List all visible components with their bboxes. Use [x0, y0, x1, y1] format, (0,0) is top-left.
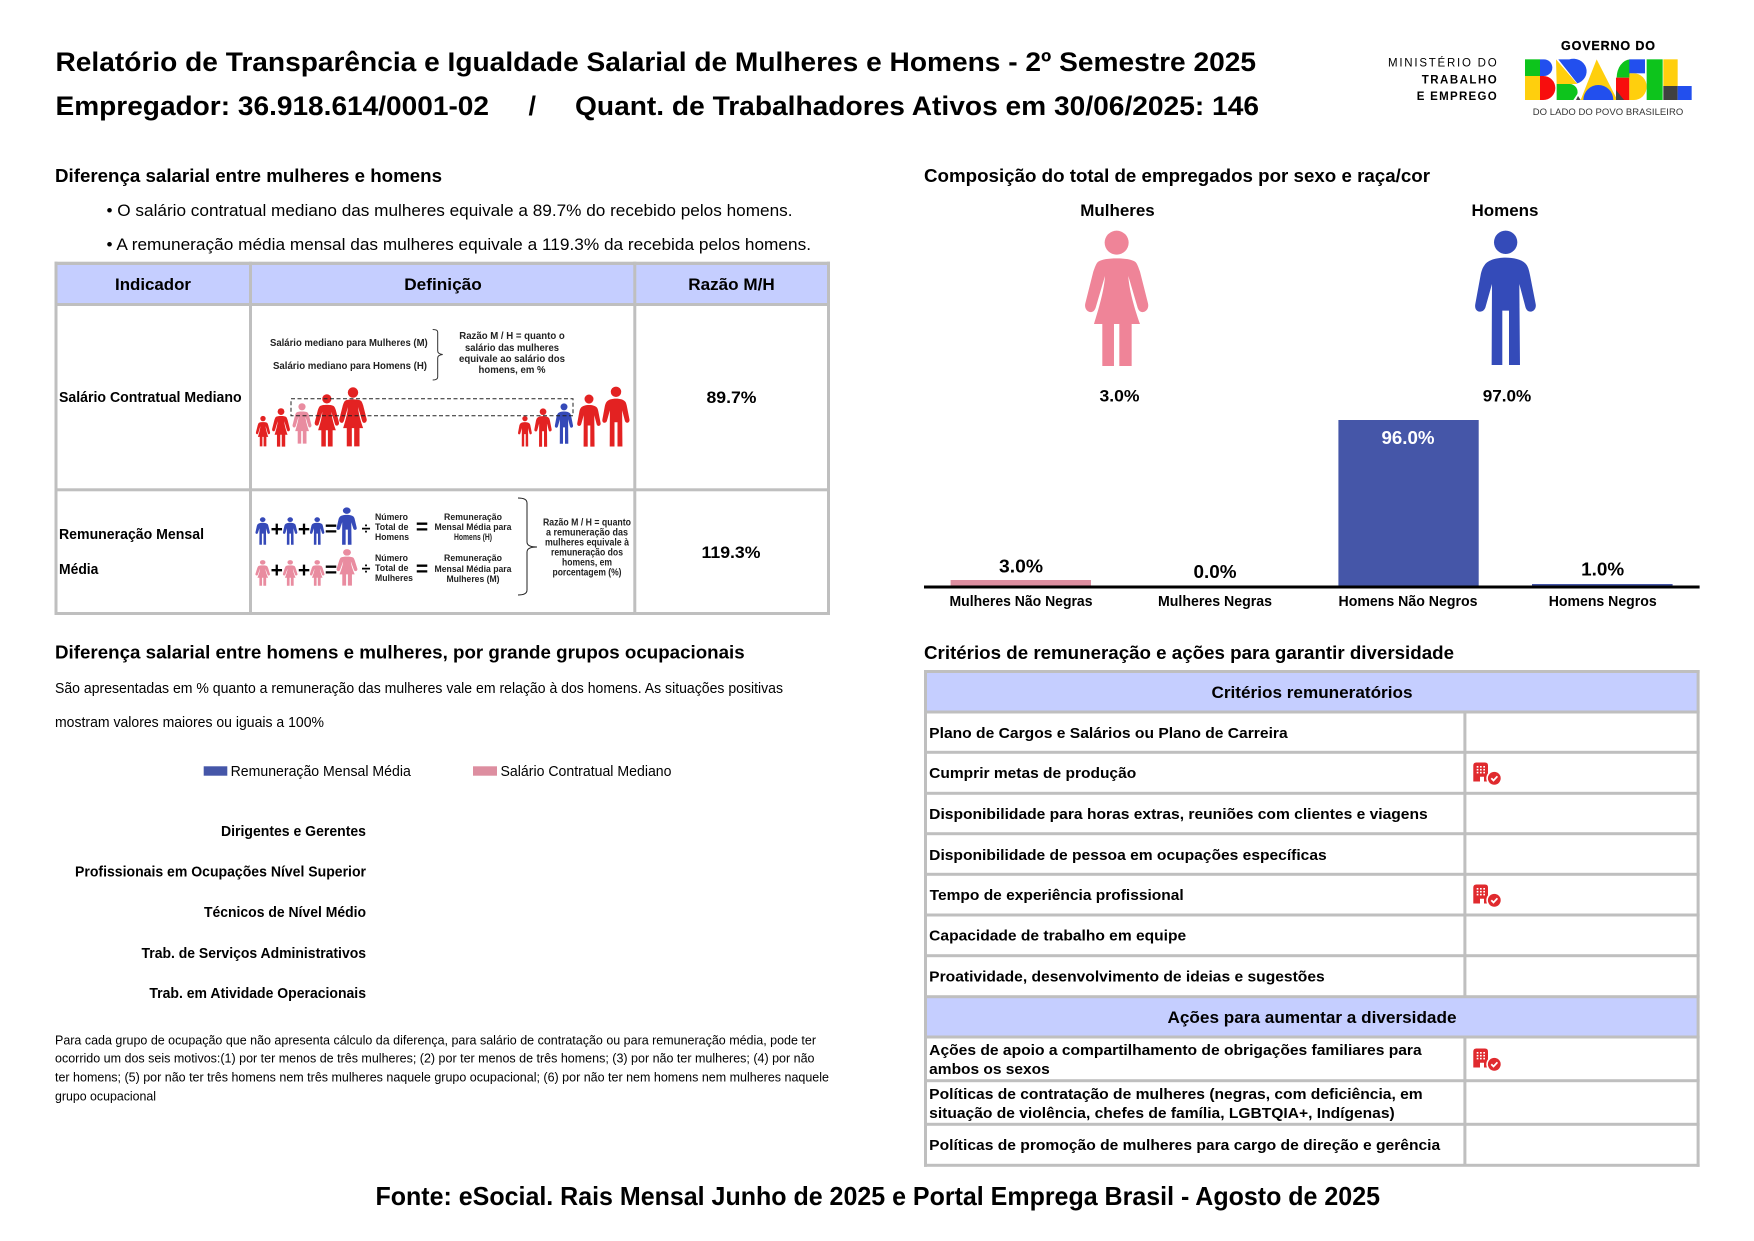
illustration: remuneração média: ÷	[362, 521, 371, 538]
row: salário contratual mediano: 89.7%	[706, 389, 757, 407]
illustration: salário mediano	[256, 330, 630, 447]
chart labels: grupos ocupacionais: Dirigentes e Gerentes	[221, 824, 366, 840]
illustration: remuneração média: Mensal Média para	[434, 564, 512, 575]
illustration: salário mediano: Salário mediano para Mulheres (M)	[270, 338, 428, 349]
illustration: salário mediano: salário das mulheres	[465, 343, 559, 354]
icon: empresa cumpre metas de produção	[1473, 762, 1502, 786]
logo: Ministério do Trabalho e Emprego: MINISTÉRIO DO	[1388, 57, 1497, 70]
footnote: ocorrido um dos seis motivos:(1) por ter menos de três mulheres; (2) por ter menos de três homens; (3) por não ter mulheres; (4) por não	[55, 1051, 814, 1066]
icon: woman	[1085, 231, 1148, 366]
logo: Governo do Brasil: GOVERNO DO	[1561, 39, 1655, 53]
group: homens: Homens	[1472, 202, 1538, 220]
bar chart: sexo e raça/cor: 0.0%	[1194, 562, 1236, 582]
illustration: remuneração média: Homens	[375, 532, 409, 543]
illustration: remuneração média: Homens (H)	[454, 532, 492, 543]
illustration: remuneração média: homens, em	[562, 558, 612, 569]
illustration: remuneração média: Remuneração	[444, 553, 502, 564]
illustration: remuneração média: +	[271, 518, 283, 541]
action rows	[929, 1042, 1441, 1154]
row: salário contratual mediano	[59, 389, 757, 407]
illustration: remuneração média: ÷	[362, 561, 371, 578]
group: homens: 97.0%	[1483, 388, 1532, 406]
illustration: remuneração média: remuneração dos	[551, 548, 623, 559]
criteria rows: Disponibilidade para horas extras, reuniões com clientes e viagens	[929, 806, 1428, 823]
title	[56, 47, 1259, 121]
row: salário contratual mediano: Salário Contratual Mediano	[59, 390, 242, 406]
logo: Governo do Brasil	[1525, 39, 1692, 118]
illustration: remuneração média: +	[298, 559, 310, 582]
title: Relatório de Transparência e Igualdade Salarial de Mulheres e Homens - 2º Semestre 2025	[56, 47, 1256, 77]
heading: Composição do total de empregados por sexo e raça/cor	[924, 165, 1430, 186]
bar chart: sexo e raça/cor: 1.0%	[1581, 560, 1624, 580]
illustration: salário mediano: equivale ao salário dos	[459, 354, 565, 365]
illustration: remuneração média: =	[416, 516, 428, 539]
bar chart: sexo e raça/cor: Homens Negros	[1549, 594, 1657, 610]
legend	[204, 764, 671, 780]
bullet points: • O salário contratual mediano das mulheres equivale a 89.7% do recebido pelos homens.	[106, 202, 792, 220]
bar chart: sexo e raça/cor: Mulheres Negras	[1158, 594, 1272, 610]
legend: Remuneração Mensal Média	[231, 764, 412, 780]
heading: Critérios de remuneração e ações para garantir diversidade	[924, 642, 1454, 663]
illustration: remuneração média: Mulheres (M)	[446, 574, 500, 585]
criteria rows: Tempo de experiência profissional	[930, 887, 1184, 904]
footer source: Fonte: eSocial. Rais Mensal Junho de 2025 e Portal Emprega Brasil - Agosto de 2025	[376, 1181, 1380, 1211]
action rows: Ações de apoio a compartilhamento de obrigações familiares para	[929, 1042, 1422, 1059]
bullet points: • A remuneração média mensal das mulheres equivale a 119.3% da recebida pelos homens.	[106, 236, 811, 254]
illustration: remuneração média: a remuneração das	[546, 528, 629, 539]
criteria rows: Disponibilidade de pessoa em ocupações específicas	[929, 847, 1327, 864]
illustration: remuneração média: Número	[375, 512, 408, 523]
table headers	[115, 276, 775, 294]
illustration: remuneração média: Número	[375, 553, 408, 564]
description	[55, 681, 783, 731]
illustration: remuneração média: Total de	[375, 522, 408, 533]
footnote	[55, 1032, 829, 1104]
title: Quant. de Trabalhadores Ativos em 30/06/2025: 146	[575, 91, 1259, 121]
title: /	[528, 91, 536, 121]
icon: empresa considera tempo de experiência	[1473, 884, 1502, 908]
panel: diferença salarial por grandes grupos ocupacionais	[55, 641, 829, 1104]
legend: Salário Contratual Mediano	[500, 764, 672, 780]
illustration: remuneração média: =	[325, 559, 337, 582]
illustration: remuneração média: Remuneração	[444, 512, 502, 523]
chart labels: grupos ocupacionais	[75, 824, 366, 1002]
logo: Ministério do Trabalho e Emprego: TRABALHO	[1422, 74, 1497, 86]
section header: ações para aumentar a diversidade: Ações para aumentar a diversidade	[1168, 1009, 1456, 1027]
heading: Diferença salarial entre mulheres e homens	[55, 165, 442, 186]
illustration: remuneração média: Total de	[375, 563, 408, 574]
footnote: Para cada grupo de ocupação que não apresenta cálculo da diferença, para salário de contratação ou para remuneração média, pode ter	[55, 1032, 817, 1048]
bar chart: sexo e raça/cor: 3.0%	[999, 557, 1043, 577]
bar chart: sexo e raça/cor: Mulheres Não Negras	[950, 594, 1092, 610]
bar chart: sexo e raça/cor: Homens Não Negros	[1338, 594, 1478, 610]
panel: diferença salarial entre mulheres e homens	[54, 165, 830, 615]
table headers: Indicador	[115, 276, 192, 294]
illustration: remuneração média: Mensal Média para	[434, 522, 512, 533]
group: homens	[1472, 202, 1538, 406]
footnote: ter homens; (5) por não ter três homens nem três mulheres naquele grupo ocupacional; (6) por não ter nem homens nem mulheres naquele	[55, 1070, 829, 1085]
criteria rows: Capacidade de trabalho em equipe	[929, 928, 1186, 944]
logo: Ministério do Trabalho e Emprego: E EMPREGO	[1417, 91, 1497, 103]
chart labels: grupos ocupacionais: Técnicos de Nível Médio	[204, 905, 366, 921]
criteria rows: Proatividade, desenvolvimento de ideias e sugestões	[929, 969, 1325, 986]
description: São apresentadas em % quanto a remuneração das mulheres vale em relação à dos homens. As situações positivas	[55, 681, 783, 697]
bar chart: sexo e raça/cor: 96.0%	[1382, 428, 1434, 448]
group: mulheres	[1080, 202, 1155, 406]
description: mostram valores maiores ou iguais a 100%	[55, 715, 324, 731]
criteria rows	[929, 725, 1428, 986]
title: Empregador: 36.918.614/0001-02	[56, 91, 489, 121]
icon: man	[1475, 231, 1536, 365]
illustration: remuneração média: =	[325, 518, 337, 541]
chart labels: grupos ocupacionais: Trab. em Atividade Operacionais	[149, 986, 366, 1002]
criteria rows: Cumprir metas de produção	[929, 765, 1136, 782]
section header: critérios remuneratórios: Critérios remuneratórios	[1212, 684, 1412, 702]
action rows: Políticas de contratação de mulheres (negras, com deficiência, em	[929, 1086, 1423, 1103]
logo: Governo do Brasil: DO LADO DO POVO BRASILEIRO	[1533, 107, 1683, 118]
table: critérios e ações	[924, 670, 1700, 1167]
illustration: remuneração média: mulheres equivale à	[545, 538, 629, 549]
action rows: situação de violência, chefes de família, LGBTQIA+, Indígenas)	[929, 1105, 1395, 1122]
action rows: ambos os sexos	[929, 1061, 1050, 1078]
logo: Ministério do Trabalho e Emprego	[1388, 57, 1497, 103]
action rows: Políticas de promoção de mulheres para cargo de direção e gerência	[929, 1137, 1441, 1154]
illustration: salário mediano: Salário mediano para Homens (H)	[273, 361, 427, 372]
panel: composição por sexo e raça/cor	[924, 165, 1700, 610]
illustration: salário mediano: Razão M / H = quanto o	[459, 331, 565, 342]
icon: empresa apoia compartilhamento de obrigações	[1473, 1048, 1502, 1072]
group: mulheres: Mulheres	[1080, 202, 1155, 220]
row: remuneração mensal média: Média	[59, 562, 99, 578]
illustration: remuneração média: +	[298, 518, 310, 541]
row: remuneração mensal média: 119.3%	[702, 544, 761, 562]
panel: critérios de remuneração e ações	[924, 642, 1700, 1167]
table headers: Razão M/H	[688, 276, 775, 294]
illustration: remuneração média: =	[416, 558, 428, 581]
criteria rows: Plano de Cargos e Salários ou Plano de Carreira	[929, 725, 1288, 742]
table headers: Definição	[404, 276, 482, 294]
illustration: remuneração média: Mulheres	[375, 573, 413, 584]
row: remuneração mensal média	[59, 527, 761, 578]
illustration: remuneração média: porcentagem (%)	[552, 568, 622, 579]
group: mulheres: 3.0%	[1100, 388, 1140, 406]
illustration: salário mediano: homens, em %	[478, 365, 546, 376]
row: remuneração mensal média: Remuneração Mensal	[59, 527, 204, 543]
illustration: remuneração média: +	[271, 559, 283, 582]
bar chart: sexo e raça/cor	[924, 420, 1700, 610]
bullet points	[106, 202, 811, 254]
heading: Diferença salarial entre homens e mulheres, por grande grupos ocupacionais	[55, 641, 745, 662]
chart labels: grupos ocupacionais: Trab. de Serviços Administrativos	[142, 946, 366, 962]
chart labels: grupos ocupacionais: Profissionais em Ocupações Nível Superior	[75, 864, 366, 880]
footnote: grupo ocupacional	[55, 1089, 156, 1104]
illustration: remuneração média: Razão M / H = quanto	[543, 518, 631, 529]
illustration: remuneração média	[255, 498, 631, 595]
table: indicadores	[54, 262, 830, 615]
